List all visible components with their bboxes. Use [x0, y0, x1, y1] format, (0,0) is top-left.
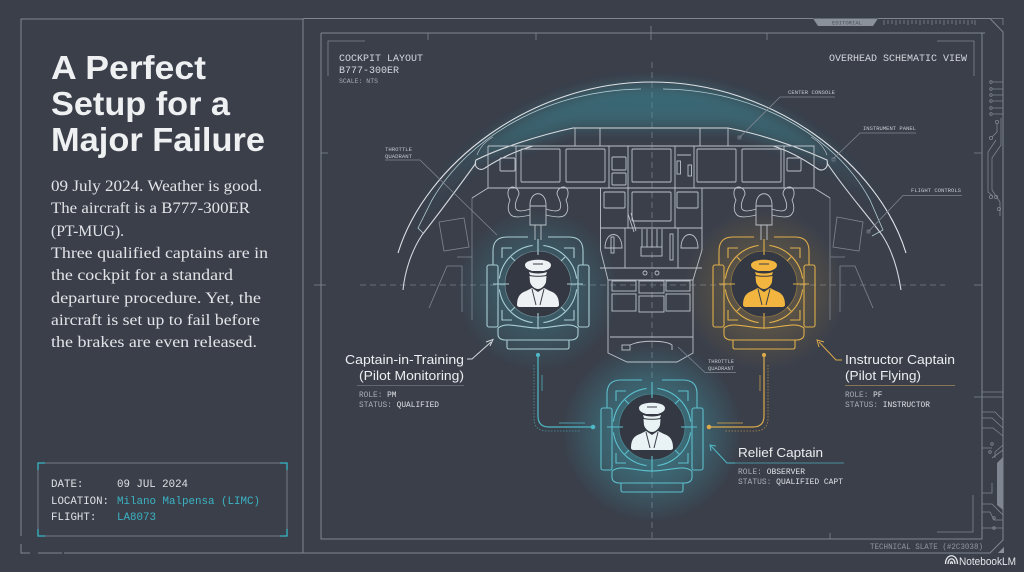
- connector: right seat to relief seat: [707, 353, 768, 431]
- header: cockpit layout: [339, 54, 423, 85]
- label: relief captain: STATUS: QUALIFIED CAPT: [738, 479, 843, 487]
- logo: NotebookLM: NotebookLM: [959, 556, 1016, 568]
- control yoke: right: [734, 187, 794, 240]
- label: captain-in-training: (Pilot Monitoring): [359, 368, 464, 383]
- connector: left seat to relief seat: [534, 353, 595, 431]
- callout: center console: [738, 89, 836, 139]
- circuit traces: right edge: [982, 81, 1003, 529]
- title: [51, 49, 265, 158]
- intro text block: The aircraft is a B777-300ER: [51, 200, 250, 217]
- editorial tab: EDITORIAL: [832, 20, 862, 26]
- label: instructor captain: ROLE: PF: [845, 392, 883, 400]
- callout: throttle quadrant lower: THROTTLE: [708, 359, 734, 365]
- intro text block: aircraft is set up to fail before: [51, 312, 260, 329]
- seat: relief captain: [601, 380, 703, 492]
- label: captain-in-training: STATUS: QUALIFIED: [359, 402, 439, 410]
- centre console: [600, 188, 702, 362]
- arrow: relief captain: [710, 445, 735, 463]
- intro text block: Three qualified captains are in: [51, 245, 268, 262]
- panel: left summary: [21, 19, 303, 553]
- seat: captain-in-training: [487, 237, 589, 349]
- intro text block: the cockpit for a standard: [51, 267, 233, 284]
- intro text block: (PT-MUG).: [51, 223, 124, 240]
- cockpit outline: dome and canopy: [398, 82, 906, 320]
- label: captain-in-training: [345, 352, 464, 410]
- flight info box: DATE:: [51, 479, 83, 491]
- flight info box: Milano Malpensa (LIMC): [117, 496, 260, 508]
- label: instructor captain: [845, 352, 955, 410]
- intro text block: 09 July 2024. Weather is good.: [51, 178, 262, 195]
- header: cockpit layout: SCALE: NTS: [339, 78, 378, 85]
- callout: throttle quadrant lower: QUADRANT: [708, 366, 734, 372]
- title: A Perfect: [51, 49, 206, 86]
- seat glows: [456, 208, 846, 522]
- flight info box: LA8073: [117, 512, 156, 524]
- icon: pilot: [631, 403, 673, 450]
- icon: pilot: [517, 260, 559, 307]
- label: captain-in-training: Captain-in-Training: [345, 352, 464, 367]
- crosshair centre lines: [360, 62, 945, 540]
- label: instructor captain: (Pilot Flying): [845, 368, 921, 383]
- flight info box: FLIGHT:: [51, 512, 96, 524]
- flight info box: LOCATION:: [51, 496, 109, 508]
- icon: pilot: [743, 260, 785, 307]
- glareshield: [475, 128, 827, 170]
- intro text block: departure procedure. Yet, the: [51, 290, 261, 307]
- callout: instrument panel: [832, 125, 916, 161]
- callout: throttle quadrant upper: QUADRANT: [385, 154, 412, 160]
- header: cockpit layout: B777-300ER: [339, 66, 399, 77]
- arrow: instructor captain: [817, 340, 842, 360]
- callout: throttle quadrant upper: THROTTLE: [385, 147, 412, 153]
- callout: instrument panel: INSTRUMENT PANEL: [863, 125, 916, 132]
- header: cockpit layout: COCKPIT LAYOUT: [339, 54, 423, 65]
- circuit block: [997, 457, 1003, 510]
- callout: throttle quadrant lower: [678, 347, 736, 372]
- label: relief captain: [735, 445, 844, 487]
- instrument panel: [472, 146, 830, 198]
- side windows and panels: [439, 217, 863, 251]
- label: relief captain: ROLE: OBSERVER: [738, 469, 805, 477]
- callout: center console: CENTER CONSOLE: [788, 89, 836, 96]
- label: captain-in-training: ROLE: PM: [359, 392, 397, 400]
- seat: instructor captain: [713, 237, 815, 349]
- dome glow: [405, 84, 900, 262]
- header: overhead schematic view: OVERHEAD SCHEMATIC VIEW: [829, 54, 967, 65]
- title: Major Failure: [51, 121, 265, 158]
- intro text block: the brakes are even released.: [51, 334, 257, 351]
- label: instructor captain: Instructor Captain: [845, 352, 955, 367]
- title: Setup for a: [51, 85, 231, 122]
- label: relief captain: Relief Captain: [738, 445, 823, 460]
- callout: throttle quadrant upper: [385, 147, 497, 235]
- footer tag: technical slate: TECHNICAL SLATE (#2C3038): [870, 544, 983, 552]
- schematic frame: [303, 18, 1004, 553]
- flight info box: 09 JUL 2024: [117, 479, 188, 491]
- label: instructor captain: STATUS: INSTRUCTOR: [845, 402, 930, 410]
- control yoke: left: [508, 187, 568, 240]
- arrow: captain-in-training: [467, 340, 493, 359]
- callout: flight controls: [867, 187, 962, 233]
- intro text block: [51, 178, 268, 351]
- flight info box: [38, 463, 287, 536]
- callout: flight controls: FLIGHT CONTROLS: [911, 187, 962, 194]
